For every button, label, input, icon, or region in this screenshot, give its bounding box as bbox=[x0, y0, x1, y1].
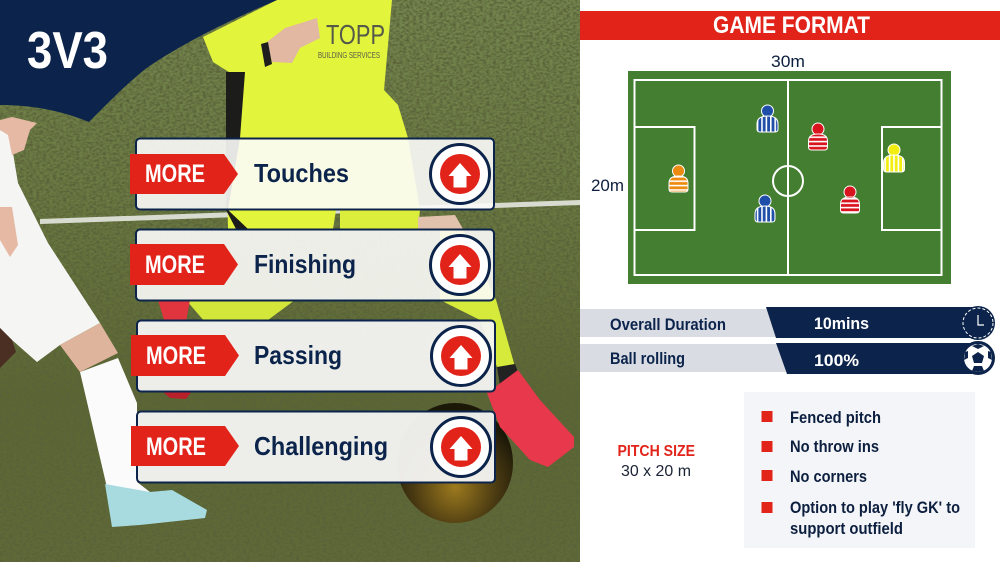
rule: fly GK option: support outfield bbox=[790, 520, 903, 538]
pitch size: 30 x 20 m bbox=[621, 463, 691, 480]
heading: GAME FORMAT bbox=[580, 11, 1000, 40]
tag: MORE: MORE bbox=[145, 160, 205, 188]
player in yellow kit: TOPP bbox=[326, 19, 385, 50]
player in yellow kit bbox=[158, 0, 574, 467]
player: red top bbox=[808, 123, 828, 150]
tag: MORE: MORE bbox=[146, 342, 206, 370]
label: Touches: Touches bbox=[254, 158, 349, 188]
rule: no throw ins bbox=[762, 438, 879, 456]
player in white kit bbox=[0, 117, 207, 527]
icon: up arrow bbox=[430, 236, 490, 294]
rule: fenced pitch bbox=[762, 409, 881, 427]
icon: up arrow bbox=[432, 326, 490, 386]
panel: more passing bbox=[131, 320, 495, 392]
panel: game format bbox=[580, 0, 1000, 562]
player: blue top bbox=[757, 105, 778, 132]
rule: fly GK option bbox=[762, 499, 960, 538]
stat row: overall duration bbox=[580, 306, 995, 340]
stat row: overall duration: 10mins bbox=[814, 314, 869, 333]
stat row: overall duration: Overall Duration bbox=[610, 315, 726, 334]
photo: youth football match on grass bbox=[0, 0, 580, 562]
rule: fenced pitch: Fenced pitch bbox=[790, 409, 881, 427]
icon: up arrow bbox=[432, 418, 490, 476]
rules list bbox=[744, 392, 975, 548]
rule: no throw ins: No throw ins bbox=[790, 438, 879, 456]
tag: MORE: MORE bbox=[146, 433, 206, 461]
label: 30m: 30m bbox=[771, 53, 805, 71]
pitch diagram bbox=[628, 71, 951, 284]
pitch size: PITCH SIZE bbox=[618, 443, 695, 460]
rule: fly GK option: Option to play 'fly GK' to bbox=[790, 499, 960, 517]
icon: up arrow bbox=[430, 144, 490, 204]
heading: 3V3: 3V3 bbox=[27, 22, 108, 80]
heading: GAME FORMAT: GAME FORMAT bbox=[713, 12, 870, 39]
player: red bottom bbox=[840, 186, 860, 213]
icon: football bbox=[962, 342, 994, 374]
panel: more touches bbox=[130, 138, 494, 210]
player: orange bbox=[669, 165, 688, 192]
panel: more challenging bbox=[131, 412, 495, 482]
football bbox=[397, 403, 513, 523]
banner: 3V3 bbox=[0, 0, 277, 122]
stat row: ball rolling: Ball rolling bbox=[610, 349, 685, 368]
player: yellow bbox=[884, 144, 904, 172]
stat row: ball rolling bbox=[580, 342, 994, 374]
rule: no corners bbox=[762, 468, 867, 486]
tag: MORE bbox=[130, 154, 238, 194]
player: blue bottom bbox=[755, 195, 775, 222]
tag: MORE: MORE bbox=[145, 251, 205, 279]
label: Challenging: Challenging bbox=[254, 431, 388, 461]
pitch size bbox=[618, 443, 695, 480]
tag: MORE bbox=[131, 335, 239, 376]
tag: MORE bbox=[130, 244, 238, 285]
player in yellow kit: BUILDING SERVICES bbox=[318, 51, 380, 60]
label: Passing: Passing bbox=[254, 340, 342, 370]
rule: no corners: No corners bbox=[790, 468, 867, 486]
tag: MORE bbox=[131, 426, 239, 466]
label: Finishing: Finishing bbox=[254, 249, 356, 279]
stat row: ball rolling: 100% bbox=[814, 351, 859, 370]
panel: more finishing bbox=[130, 230, 494, 300]
label: 20m: 20m bbox=[591, 177, 624, 195]
icon: clock bbox=[961, 306, 995, 340]
